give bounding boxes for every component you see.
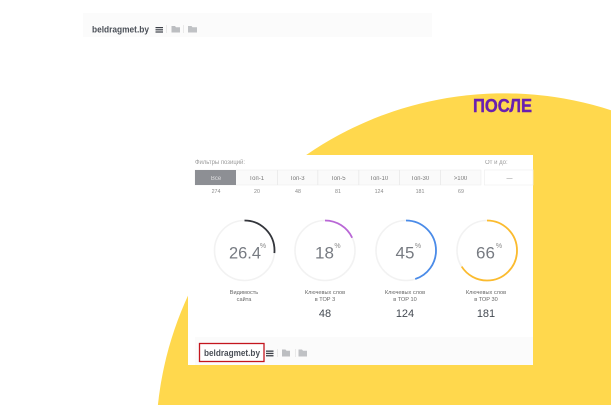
gauge: visibility: сайта: [237, 296, 252, 303]
gauge: visibility: Видимость: [230, 290, 258, 296]
gauge: top 30: в ТОР 30: [474, 297, 498, 303]
gauge: top 10: в ТОР 10: [393, 297, 417, 303]
gauge: top 3: 18: [315, 244, 334, 262]
gauge: top 30: %: [496, 243, 502, 250]
filter tabs: [195, 170, 481, 185]
filter counts: 274: [212, 189, 220, 195]
gauge: top 10: 45: [396, 244, 414, 262]
gauge: top 3: 48: [319, 308, 331, 320]
filter tabs: Топ-10: [370, 176, 389, 182]
gauge: top 3: Ключевых слов: [305, 290, 345, 296]
icon: link folder: [298, 350, 307, 356]
gauge: top 30: [457, 220, 517, 320]
gauge: top 3: %: [334, 243, 341, 250]
gauge: top 10: [376, 220, 436, 320]
gauge: top 10: 124: [396, 308, 414, 320]
filter counts: 20: [254, 189, 260, 195]
range filter: От и до:: [485, 160, 508, 166]
filter tabs: Топ-3: [289, 176, 305, 182]
footer strip: site name after: [195, 337, 533, 365]
icon: list: [156, 27, 163, 33]
top strip: site name before: beldragmet.by: [92, 24, 150, 36]
gauge: top 30: Ключевых слов: [466, 290, 506, 296]
filter label: Фильтры позиций:: [195, 159, 245, 166]
top strip: site name before: [83, 13, 432, 37]
highlight box: [200, 344, 264, 362]
heading: после: ПОСЛЕ: [473, 95, 532, 116]
footer strip: site name after: beldragmet.by: [204, 348, 261, 358]
range filter: [484, 160, 533, 185]
filter counts: 69: [458, 189, 464, 195]
gauge: top 30: 181: [477, 308, 495, 320]
panel: site statistics: [188, 155, 533, 365]
filter counts: 81: [335, 189, 341, 195]
gauge: visibility: [214, 220, 274, 303]
gauge: top 10: %: [415, 243, 421, 250]
gauge: top 30: 66: [476, 244, 495, 262]
filter counts: 48: [295, 189, 301, 195]
gauge: visibility: 26.4: [229, 244, 261, 262]
filter counts: 181: [416, 189, 424, 195]
filter counts: 124: [375, 189, 383, 195]
filter tabs: Все: [211, 176, 222, 182]
icon: link folder: [188, 26, 197, 32]
gauge: top 3: [295, 220, 355, 320]
gauge: top 10: Ключевых слов: [385, 290, 425, 296]
filter tabs: Топ-5: [330, 176, 346, 182]
icon: list: [266, 350, 274, 356]
filter tabs: Топ-30: [411, 176, 430, 182]
gauge: top 3: в ТОР 3: [315, 297, 335, 303]
gauge: visibility: %: [260, 243, 266, 250]
yellow circle background: [158, 93, 611, 405]
filter tabs: Топ-1: [249, 176, 265, 182]
icon: folder: [172, 26, 180, 32]
range filter: —: [506, 176, 512, 182]
filter tabs: >100: [454, 176, 468, 182]
icon: folder: [282, 350, 290, 356]
filter counts: [212, 189, 464, 195]
